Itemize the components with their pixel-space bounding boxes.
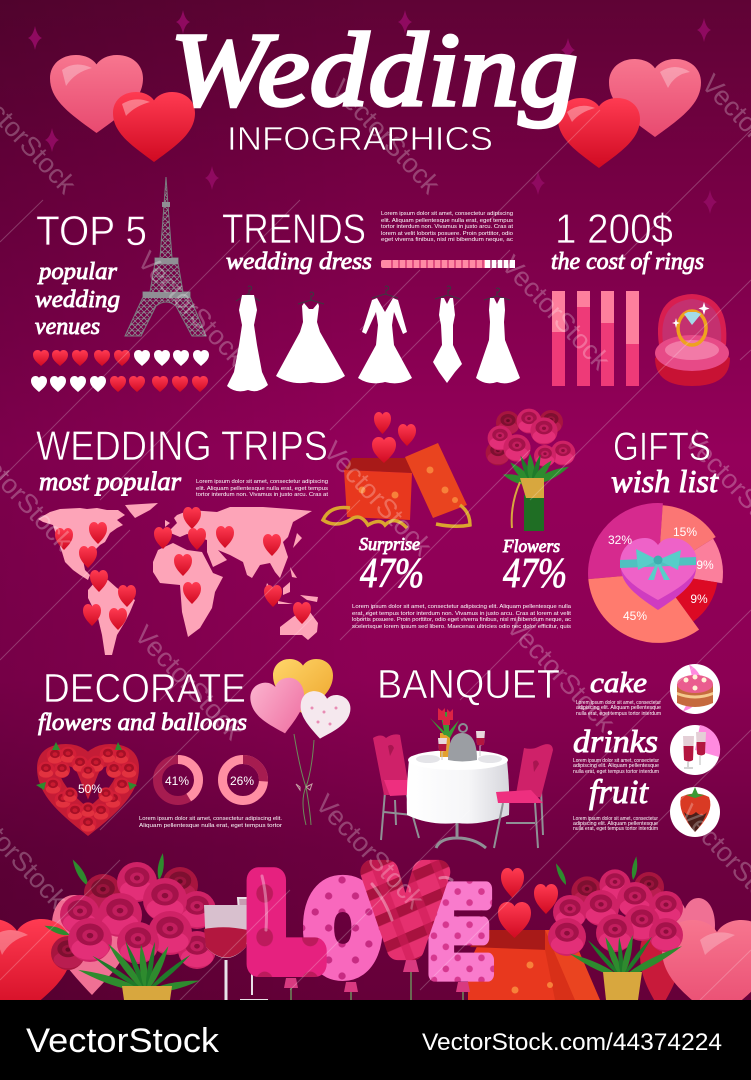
subheading: most popular: most popular	[39, 467, 182, 496]
label: surprise: 47%	[360, 551, 424, 597]
icon: left chair	[373, 734, 419, 840]
balloon letters love: V	[371, 848, 440, 972]
footer band	[0, 1000, 751, 1080]
subheading: flowers and balloons: flowers and balloons	[38, 710, 247, 736]
text block: adipiscing elit. Aliquam pellentesque	[573, 821, 658, 827]
bar chart	[552, 291, 639, 386]
pie chart	[588, 503, 723, 643]
text block: nulla erat, eget tempus tortor interdum	[573, 769, 659, 775]
subheading: wish list: wish list	[611, 463, 719, 499]
text block: lobortis posuere. Proin porttitor, odio eget viverra finibus, nisl mi bibendum neque, ac	[352, 617, 571, 623]
heading: gifts: GIFTS	[613, 425, 711, 469]
label: flowers: 47%	[503, 551, 567, 597]
icon: ring box	[655, 294, 730, 386]
text block	[196, 479, 329, 498]
balloon letters love: E	[428, 863, 492, 1001]
donut chart: 26%: 26%	[230, 774, 254, 788]
panel: banquet	[373, 661, 560, 848]
pie labels	[608, 525, 714, 623]
label: surprise: Surprise	[359, 534, 420, 554]
panel: gifts wish list	[588, 425, 723, 643]
left back hearts	[0, 895, 132, 1019]
panel: decorate	[36, 659, 353, 832]
label: flowers: Flowers	[502, 536, 560, 556]
text block: eget viverra finibus, nisl mi bibendum neque, ac	[381, 237, 513, 243]
text block	[576, 700, 661, 717]
label: drinks: drinks	[573, 723, 658, 759]
panel: trends wedding dress	[222, 205, 520, 391]
pie labels: 9%	[690, 592, 708, 606]
label: fruit: fruit	[589, 774, 650, 811]
gift box bottom	[468, 930, 600, 1000]
icon: heart balloons	[247, 659, 353, 825]
subheading: popular wedding venues: venues	[35, 314, 100, 340]
donut chart: 26%	[222, 760, 264, 800]
map pins	[55, 507, 311, 630]
panel: fruit	[573, 774, 720, 837]
dresses	[227, 286, 520, 391]
text block: Lorem ipsum dolor sit amet, consectetur	[576, 700, 661, 706]
rating hearts	[31, 350, 209, 392]
dress 3	[358, 298, 412, 383]
text block: Lorem ipsum dolor sit amet, consectetur adipiscing	[381, 211, 513, 217]
text block: Lorem ipsum dolor sit amet, consectetur adipiscing elit. Aliquam pellentesque nulla	[352, 604, 571, 610]
bouquet right	[548, 856, 684, 1000]
text block: tortor interdum non. Vivamus in justo arcu. Cras at	[381, 224, 514, 230]
watermarks: VectorStock	[501, 612, 621, 738]
panel: top 5 venues	[31, 177, 209, 392]
watermarks	[0, 69, 751, 925]
text block: scelerisque lorem ipsum sed libero. Maecenas ultricies odio nec dolor efficitur, quis	[352, 624, 571, 630]
right back hearts	[640, 898, 751, 1020]
heading: wedding trips: WEDDING TRIPS	[36, 422, 328, 469]
heading: banquet: BANQUET	[377, 661, 560, 707]
pie labels: 45%	[623, 609, 647, 623]
subheading: popular wedding venues	[35, 259, 120, 340]
progress bar	[381, 260, 515, 268]
heading: price: 1 200$	[555, 205, 673, 252]
panel: drinks	[573, 723, 720, 775]
subheading: wedding dress: wedding dress	[226, 249, 372, 275]
hearts above box	[372, 412, 416, 463]
text block: lorem at velit lobortis posuere. Proin porttitor, odio	[381, 231, 513, 237]
icon: eiffel tower	[125, 177, 206, 336]
text block	[573, 816, 658, 832]
balloon letters love	[251, 848, 492, 1001]
panel: cake	[576, 664, 720, 717]
watermarks: VectorStock	[129, 620, 249, 746]
text block	[352, 604, 572, 630]
heading: decorate: DECORATE	[43, 665, 246, 711]
text block: nulla erat, eget tempus tortor interdum	[576, 711, 661, 717]
heading: trends: TRENDS	[222, 205, 366, 252]
title: Wedding	[170, 11, 578, 128]
footer logo: VectorStock	[26, 1022, 220, 1060]
sparkles	[28, 10, 717, 214]
dress 5	[476, 298, 520, 383]
dress 4	[433, 298, 462, 383]
balloon letters love: L	[251, 854, 318, 990]
icon: heart gift	[620, 538, 697, 610]
subheading: the cost of rings: the cost of rings	[551, 249, 704, 275]
icon: gift box	[323, 443, 470, 528]
panel: cost of rings	[551, 205, 730, 386]
donut chart: 41%	[158, 760, 198, 800]
text block: erat, eget tempus tortor interdum non. Vivamus in justo arcu. Cras at lorem at velit	[352, 611, 572, 617]
text block: adipiscing elit. Aliquam pellentesque	[576, 705, 661, 711]
label: 50%: 50%	[78, 782, 102, 796]
icon: chocolate strawberry	[670, 787, 720, 837]
balloon letters love: O	[308, 863, 377, 993]
text block: Aliquam pellentesque nulla erat, eget tempus tortor	[139, 823, 282, 829]
text block: Lorem ipsum dolor sit amet, consectetur	[573, 758, 659, 764]
text block: tortor interdum non. Vivamus in justo arcu. Cras at	[196, 492, 329, 498]
text block	[573, 758, 659, 775]
icon: tulips, cloche and glasses	[430, 708, 485, 762]
text block: nulla erat, eget tempus tortor interdum	[573, 826, 658, 832]
pie labels: 15%	[673, 525, 697, 539]
hearts top right	[558, 59, 701, 168]
icon: cake	[670, 664, 720, 714]
heading: top 5: TOP 5	[36, 207, 147, 254]
watermarks: VectorStock	[318, 436, 438, 562]
text block: adipiscing elit. Aliquam pellentesque	[573, 763, 659, 769]
text block: Lorem ipsum dolor sit amet, consectetur	[573, 816, 658, 822]
hearts top left	[50, 55, 195, 162]
icon: right chair	[494, 744, 553, 848]
footer url: VectorStock.com/44374224	[422, 1029, 722, 1056]
icon: rose heart wreath	[36, 742, 137, 832]
label: flowers	[502, 536, 567, 597]
watermarks: VectorStock	[326, 74, 446, 200]
bouquet left	[43, 853, 216, 1000]
text block: Lorem ipsum dolor sit amet, consectetur adipiscing	[196, 479, 328, 485]
pie labels: 32%	[608, 533, 632, 547]
panel: surprise gift	[323, 412, 470, 597]
label: surprise	[359, 534, 424, 597]
subheading: popular wedding venues: wedding	[35, 287, 120, 313]
world map	[38, 503, 318, 655]
hearts above box	[498, 868, 558, 938]
label: cake: cake	[590, 668, 647, 699]
panel: flowers	[486, 409, 575, 597]
icon: bouquet	[486, 409, 575, 531]
text block: elit. Aliquam pellentesque nulla erat, eget tempus	[381, 218, 513, 224]
title: INFOGRAPHICS	[227, 120, 493, 157]
text block	[139, 816, 282, 829]
subheading: popular wedding venues: popular	[37, 259, 118, 285]
watermarks: VectorStock	[496, 250, 616, 376]
text block: Lorem ipsum dolor sit amet, consectetur adipiscing elit.	[139, 816, 282, 822]
dress 2	[276, 303, 345, 383]
bottom decoration	[0, 848, 751, 1020]
icon: wine glasses	[670, 725, 720, 775]
wine glasses	[204, 898, 268, 1000]
text block: elit. Aliquam pellentesque nulla erat, eget tempus	[196, 486, 328, 492]
dress 1	[227, 295, 268, 391]
donut chart: 41%: 41%	[165, 774, 189, 788]
watermarks: VectorStock	[132, 246, 252, 372]
text block	[381, 211, 514, 243]
panel: wedding trips	[36, 422, 329, 655]
watermarks: VectorStock	[310, 789, 430, 915]
pie labels: 9%	[696, 558, 714, 572]
icon: table	[407, 750, 509, 848]
